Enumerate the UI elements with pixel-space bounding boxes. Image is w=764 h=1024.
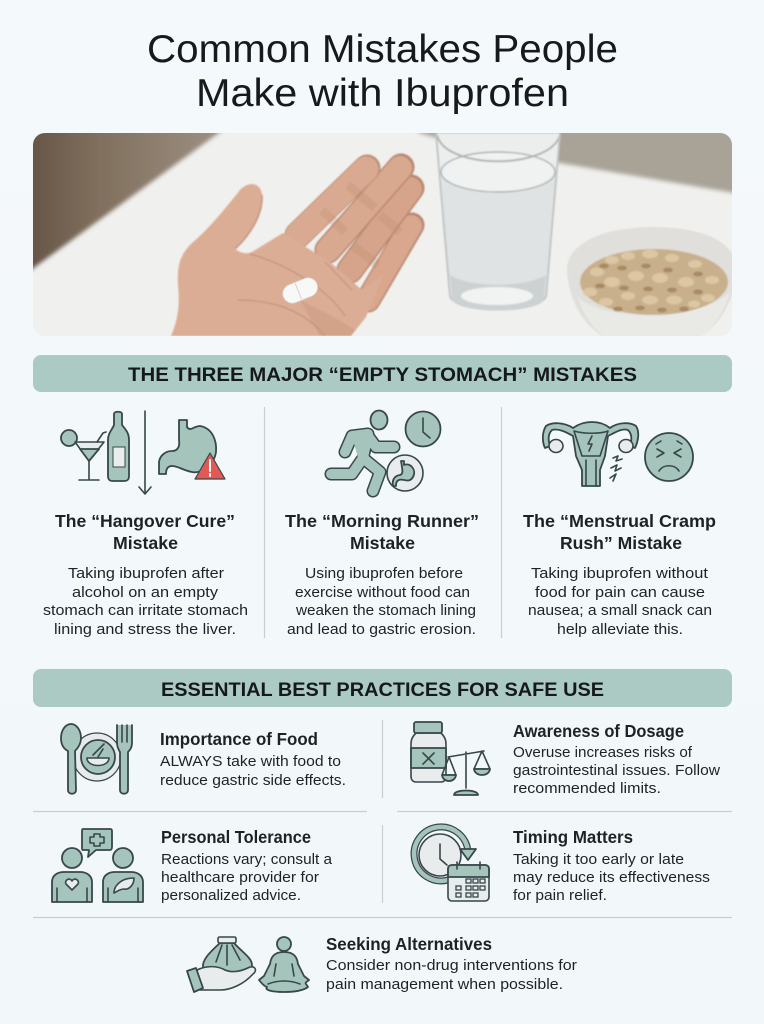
banner: three major mistakes: THE THREE MAJOR “EMPTY STOMACH” MISTAKES <box>128 364 637 386</box>
text: Importance of Food <box>160 729 318 749</box>
body text: and lead to gastric erosion. <box>287 621 476 638</box>
text: Timing Matters <box>513 827 633 847</box>
text <box>161 827 333 904</box>
title <box>147 28 618 115</box>
body text: lining and stress the liver. <box>54 621 236 638</box>
icon: plate, spoon and fork <box>61 724 132 794</box>
text: Overuse increases risks of <box>513 744 693 761</box>
heading: The “Menstrual Cramp <box>523 511 716 531</box>
body text: nausea; a small snack can <box>528 602 712 619</box>
icon: clock and calendar <box>414 827 489 901</box>
text: Reactions vary; consult a <box>161 851 333 868</box>
heading: Mistake <box>350 533 415 553</box>
water glass <box>436 133 560 310</box>
body text: weaken the stomach lining <box>295 602 476 619</box>
pill <box>282 277 318 304</box>
text <box>513 827 710 904</box>
hand <box>171 167 412 336</box>
icon: two people with speech bubble <box>52 829 143 902</box>
item: importance of food <box>61 724 346 794</box>
text <box>513 721 720 797</box>
body text: alcohol on an empty <box>72 584 219 601</box>
heading <box>285 511 479 553</box>
text: Seeking Alternatives <box>326 934 492 954</box>
icon: uterus and nauseous face <box>543 422 693 486</box>
body text <box>287 565 476 638</box>
text: reduce gastric side effects. <box>160 772 346 789</box>
text: personalized advice. <box>161 887 301 904</box>
heading: The “Hangover Cure” <box>55 511 235 531</box>
heading <box>523 511 716 553</box>
text: healthcare provider for <box>161 869 319 886</box>
item: timing matters <box>414 827 710 904</box>
heading: The “Morning Runner” <box>285 511 479 531</box>
text: recommended limits. <box>513 780 661 797</box>
text: pain management when possible. <box>326 976 563 993</box>
item: personal tolerance <box>52 827 333 904</box>
banner: best practices <box>33 669 732 707</box>
icon: runner, clock, stomach <box>331 410 440 491</box>
body text: stomach can irritate stomach <box>43 602 248 619</box>
body text: exercise without food can <box>295 584 470 601</box>
body text: help alleviate this. <box>557 621 683 638</box>
text: Personal Tolerance <box>161 827 311 847</box>
title: Common Mistakes People <box>147 28 618 71</box>
oat bowl <box>567 227 737 340</box>
icon: alcohol, arrow, stomach warning <box>61 411 225 494</box>
item: seeking alternatives <box>187 934 577 993</box>
text <box>160 729 346 789</box>
body text <box>528 565 712 638</box>
heading: Rush” Mistake <box>560 533 682 553</box>
panel: morning runner mistake <box>285 410 479 638</box>
photo: hand with pill, water and oats <box>33 133 732 336</box>
body text: Using ibuprofen before <box>305 565 463 582</box>
text: Awareness of Dosage <box>513 721 684 741</box>
heading <box>55 511 235 553</box>
panel: menstrual cramp rush mistake <box>523 422 716 638</box>
text: for pain relief. <box>513 887 607 904</box>
banner: three major mistakes <box>33 355 732 392</box>
banner: best practices: ESSENTIAL BEST PRACTICES FOR SAFE USE <box>161 679 604 701</box>
body text: Taking ibuprofen without <box>531 565 709 582</box>
item: awareness of dosage <box>411 721 720 797</box>
text: Consider non-drug interventions for <box>326 957 577 974</box>
text <box>326 934 577 993</box>
body text <box>43 565 248 638</box>
panel: hangover cure mistake <box>43 411 248 638</box>
title: Make with Ibuprofen <box>196 72 569 115</box>
text: Taking it too early or late <box>513 851 684 868</box>
text: gastrointestinal issues. Follow <box>513 762 720 779</box>
body text: food for pain can cause <box>535 584 705 601</box>
icon: ice pack in hand and meditating person <box>187 937 309 992</box>
body text: Taking ibuprofen after <box>68 565 224 582</box>
text: ALWAYS take with food to <box>160 753 341 770</box>
heading: Mistake <box>113 533 178 553</box>
icon: pill bottle and scale <box>411 722 490 795</box>
text: may reduce its effectiveness <box>513 869 710 886</box>
